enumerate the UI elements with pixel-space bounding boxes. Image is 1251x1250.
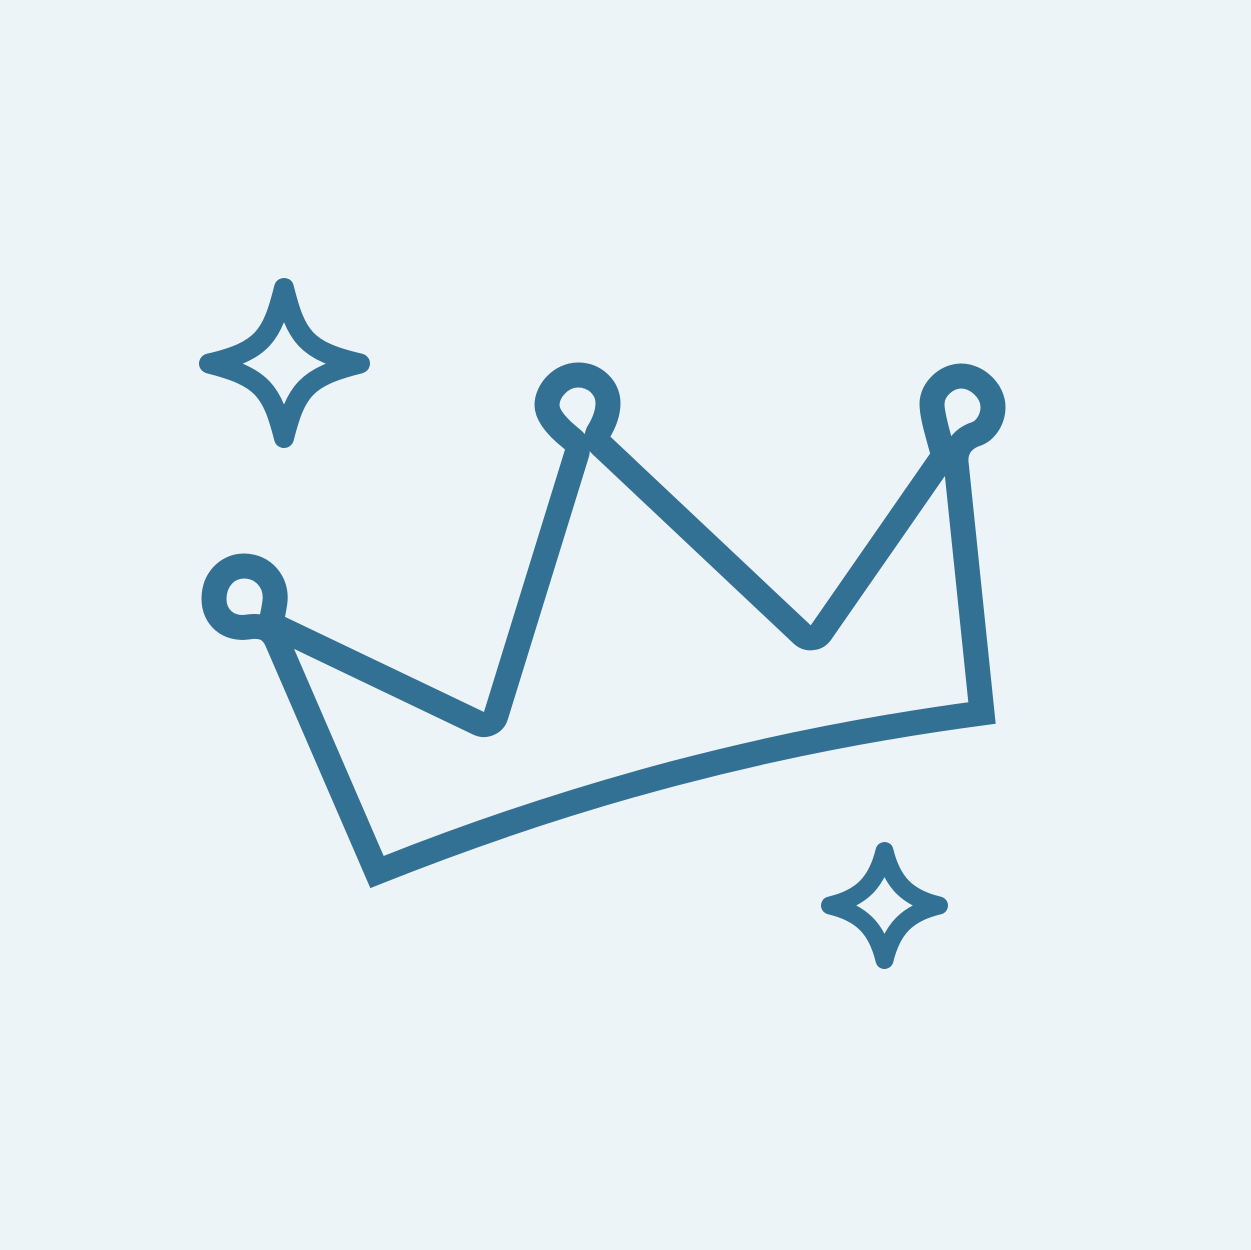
sparkle: large top left (209, 288, 360, 438)
sparkle: small bottom right (830, 851, 939, 960)
crown (214, 375, 993, 872)
crown outline (214, 375, 993, 872)
